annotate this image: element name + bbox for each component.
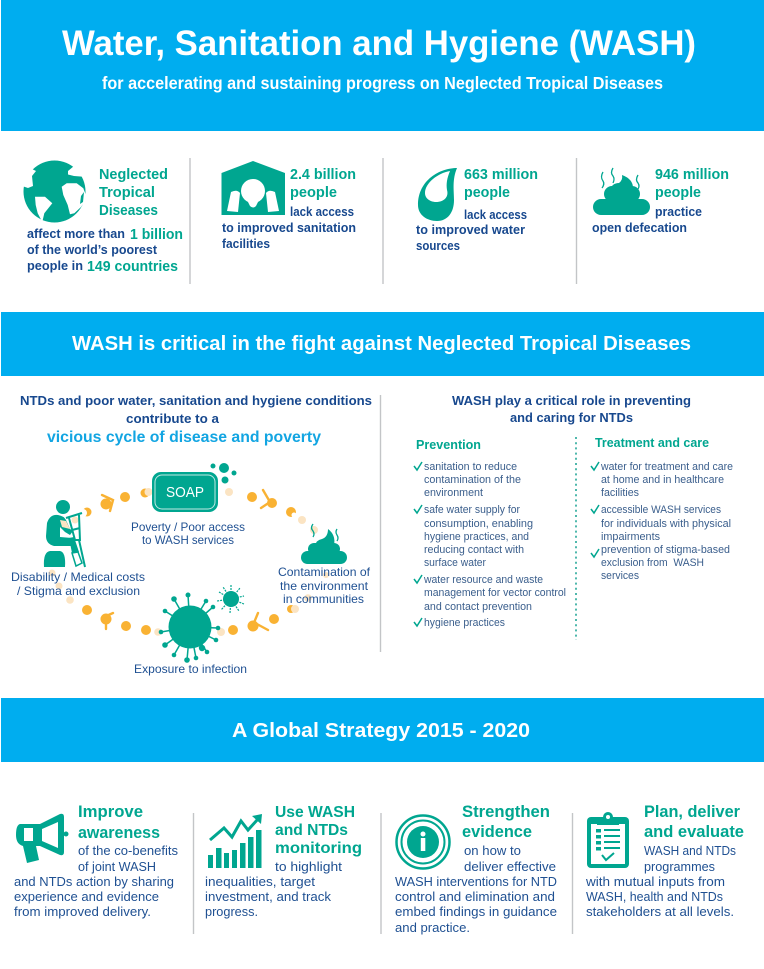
action: monitoring: Use WASH	[275, 804, 355, 821]
stat: open defecation: people	[655, 184, 701, 201]
column: treatment and care: impairments	[601, 531, 660, 543]
column: prevention: Prevention	[416, 438, 481, 452]
label: poverty: Poverty / Poor access	[131, 520, 245, 534]
stat: sanitation: to improved sanitation	[222, 221, 356, 235]
action: improve awareness: of the co-benefits	[78, 844, 178, 858]
stat: neglected tropical diseases	[22, 160, 183, 275]
action: strengthen evidence: deliver effective	[464, 860, 556, 874]
stat: neglected tropical diseases: people in	[27, 259, 83, 273]
action: plan deliver evaluate: Plan, deliver	[644, 803, 741, 821]
panel: strategy actions	[14, 803, 744, 935]
label: exposure: Exposure to infection	[134, 662, 247, 676]
action: monitoring: progress.	[205, 905, 258, 919]
label: disability: / Stigma and exclusion	[17, 584, 140, 598]
action: plan deliver evaluate: programmes	[644, 860, 715, 874]
stat: water: to improved water	[416, 223, 525, 237]
action: plan deliver evaluate: and evaluate	[644, 823, 744, 841]
action: plan deliver evaluate: with mutual inputs from	[585, 875, 725, 889]
heading: vicious cycle	[20, 394, 372, 446]
action: improve awareness: from improved delivery.	[14, 905, 151, 919]
stat: water: lack access	[464, 208, 527, 222]
heading: WASH role: and caring for NTDs	[510, 411, 633, 425]
column: prevention: hygiene practices, and	[424, 531, 529, 543]
section banner: WASH is critical: WASH is critical in the fight against Neglected Tropical Diseases	[72, 333, 691, 355]
label: contamination	[278, 565, 371, 606]
stat: open defecation: 946 million	[655, 166, 729, 183]
stat: water: people	[464, 184, 510, 201]
section banner: WASH is critical	[1, 312, 764, 376]
stat: sanitation: facilities	[222, 237, 270, 251]
action: strengthen evidence	[395, 803, 557, 935]
column: prevention: management for vector control	[424, 587, 566, 599]
action: strengthen evidence: embed findings in guidance	[395, 905, 557, 919]
action: improve awareness: awareness	[78, 824, 160, 842]
icon: waste pile small	[301, 524, 347, 564]
column: prevention: consumption, enabling	[424, 518, 533, 530]
stat: neglected tropical diseases: 1 billion	[130, 226, 183, 243]
column: prevention: environment	[424, 487, 483, 499]
action: plan deliver evaluate: WASH, health and NTDs	[586, 890, 723, 904]
subtitle: for accelerating and sustaining progress on Neglected Tropical Diseases	[102, 73, 663, 93]
heading: Neglected	[99, 166, 168, 183]
label: contamination: the environment	[280, 579, 369, 593]
icon: water drop	[418, 168, 457, 221]
column: prevention: contamination of the	[424, 474, 521, 486]
column: prevention: hygiene practices	[424, 617, 505, 629]
column: treatment and care: water for treatment and care	[600, 461, 733, 473]
icon: soap	[152, 463, 236, 512]
icon: toilet house	[222, 161, 285, 215]
column: prevention: and contact prevention	[424, 601, 532, 613]
column: treatment and care: Treatment and care	[595, 436, 709, 450]
heading: WASH role: WASH play a critical role in preventing	[452, 394, 691, 408]
stat: water	[416, 166, 538, 253]
action: strengthen evidence: WASH interventions for NTD	[395, 875, 557, 889]
column: treatment and care: prevention of stigma-based	[601, 544, 730, 556]
column: prevention: safe water supply for	[424, 504, 520, 516]
column: treatment and care	[591, 436, 733, 582]
column: treatment and care: accessible WASH services	[601, 504, 721, 516]
stat: open defecation	[592, 166, 729, 235]
column: treatment and care: services	[601, 570, 639, 582]
action: plan deliver evaluate: stakeholders at all levels.	[586, 905, 734, 919]
action: improve awareness: Improve	[78, 803, 143, 821]
label: disability	[11, 570, 145, 598]
description: affect more than	[27, 227, 125, 241]
stat: water: sources	[416, 239, 460, 253]
heading: vicious cycle: vicious cycle of disease and poverty	[47, 429, 321, 446]
label: contamination: in communities	[283, 592, 364, 606]
header banner	[1, 0, 764, 131]
column: treatment and care: for individuals with physical	[601, 518, 731, 530]
cycle dots	[48, 488, 329, 636]
action: improve awareness: of joint WASH	[78, 860, 156, 874]
icon: soap: SOAP	[166, 484, 204, 501]
section banner: global strategy: A Global Strategy 2015 - 2020	[232, 720, 530, 742]
stat: open defecation: practice	[655, 205, 702, 219]
column: prevention: surface water	[424, 557, 486, 569]
title: Water, Sanitation and Hygiene (WASH)	[62, 24, 696, 63]
icon: waste pile	[593, 168, 650, 215]
action: monitoring: and NTDs	[275, 822, 348, 839]
column: prevention: reducing contact with	[424, 544, 524, 556]
stat: neglected tropical diseases: 149 countries	[87, 258, 178, 275]
label: contamination: Contamination of	[278, 565, 371, 579]
icon: person with crutch	[44, 500, 85, 567]
icon: info target	[396, 816, 450, 868]
heading: vicious cycle: NTDs and poor water, sanitation and hygiene conditions	[20, 394, 372, 408]
stat: sanitation: people	[290, 184, 337, 201]
heading: WASH role	[452, 394, 691, 425]
action: plan deliver evaluate: WASH and NTDs	[644, 844, 736, 858]
action: improve awareness: and NTDs action by sharing	[14, 875, 174, 889]
column: prevention: water resource and waste	[423, 574, 543, 586]
action: strengthen evidence: control and elimination and	[395, 890, 555, 904]
stat: sanitation: 2.4 billion	[290, 166, 356, 183]
action: strengthen evidence: on how to	[464, 844, 521, 858]
action: monitoring: monitoring	[275, 840, 362, 857]
column: prevention: sanitation to reduce	[424, 461, 517, 473]
icon: globe	[22, 160, 87, 222]
stat: neglected tropical diseases: Diseases	[99, 202, 158, 219]
column: prevention	[414, 438, 566, 629]
panel: vicious cycle	[11, 394, 372, 676]
stat: neglected tropical diseases: of the world’s poorest	[27, 243, 158, 257]
icon: virus	[159, 585, 244, 663]
action: monitoring: to highlight	[275, 860, 343, 874]
icon: megaphone	[16, 814, 68, 863]
action: plan deliver evaluate	[585, 803, 744, 919]
column: treatment and care: at home and in healthcare	[601, 474, 724, 486]
column: treatment and care: exclusion from WASH	[601, 557, 704, 569]
action: improve awareness: experience and evidence	[14, 890, 159, 904]
stat: neglected tropical diseases: Tropical	[99, 184, 155, 201]
column: treatment and care: facilities	[601, 487, 639, 499]
label: poverty: to WASH services	[142, 533, 234, 547]
action: improve awareness	[14, 803, 178, 919]
stat: open defecation: open defecation	[592, 221, 687, 235]
stat: sanitation: lack access	[290, 205, 354, 219]
icon: chart	[208, 814, 262, 868]
icon: clipboard	[587, 812, 629, 868]
stat: water: 663 million	[464, 166, 538, 183]
action: monitoring: investment, and track	[205, 890, 332, 904]
stat: sanitation	[222, 161, 356, 251]
heading: vicious cycle: contribute to a	[126, 412, 220, 426]
action: strengthen evidence: evidence	[462, 823, 532, 841]
label: disability: Disability / Medical costs	[11, 570, 145, 584]
action: strengthen evidence: Strengthen	[462, 803, 550, 821]
action: strengthen evidence: and practice.	[395, 921, 470, 935]
action: monitoring: inequalities, target	[205, 875, 316, 889]
label: poverty	[131, 520, 245, 547]
panel: key statistics	[22, 158, 729, 284]
panel: WASH role	[414, 394, 733, 640]
action: monitoring	[205, 804, 362, 919]
section banner: global strategy	[1, 698, 764, 762]
